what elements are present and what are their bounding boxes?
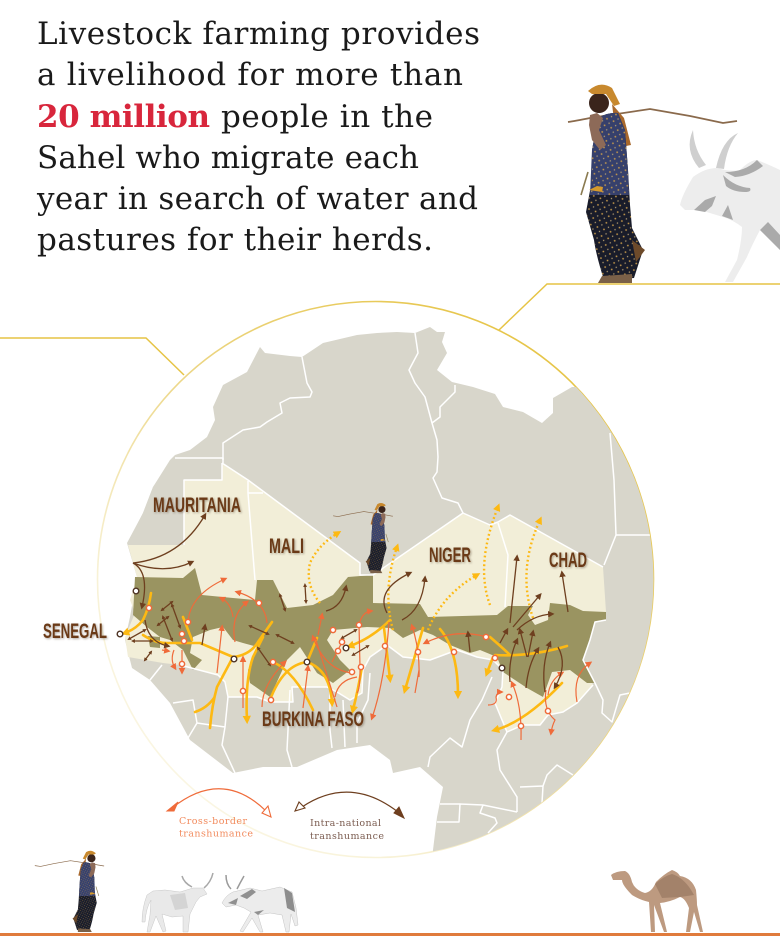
- cow, bottom, facing left: [222, 875, 298, 932]
- herder, top right: [568, 85, 737, 283]
- camel: [611, 870, 703, 932]
- brown routes, intra-national: [129, 515, 568, 692]
- headline text: year in search of water and: [36, 181, 478, 217]
- country labels: NIGER: [429, 544, 471, 567]
- country labels: [43, 494, 587, 731]
- legend: cross-border transhumance: Cross-border: [179, 816, 247, 827]
- yellow routes, thick: [125, 593, 567, 730]
- origin markers, dark rings: [133, 588, 505, 671]
- country borders: [150, 333, 650, 833]
- country labels: BURKINA FASO: [262, 708, 364, 731]
- ground bar, bottom: [0, 933, 780, 936]
- country labels: MALI: [269, 535, 304, 558]
- headline text: 20 million: [37, 99, 210, 135]
- yellow routes, dotted: [309, 507, 540, 630]
- herder on the map: [333, 503, 393, 573]
- callout line, upper right: [499, 284, 780, 330]
- headline text: people in the: [221, 99, 433, 135]
- country labels: CHAD: [549, 549, 587, 572]
- Western Sahara patch: [142, 486, 154, 514]
- legend: cross-border transhumance: [167, 789, 271, 840]
- legend: intra-national transhumance: Intra-national: [310, 818, 381, 829]
- map of West Africa: [123, 327, 654, 852]
- cow, bottom, facing right: [142, 873, 213, 932]
- callout line, upper left: [0, 338, 184, 375]
- legend: intra-national transhumance: transhumance: [310, 831, 384, 842]
- legend: intra-national transhumance: [295, 792, 404, 842]
- land base: [125, 327, 654, 852]
- origin markers, orange rings: [146, 600, 551, 729]
- orange routes, cross-border: [162, 579, 590, 740]
- headline text: Livestock farming provides: [37, 16, 480, 52]
- map circle outline: [98, 302, 654, 858]
- transhumance belt, olive: [133, 568, 606, 697]
- legend: [167, 789, 404, 842]
- country labels: MAURITANIA: [153, 494, 241, 517]
- headline text: pastures for their herds.: [37, 222, 433, 258]
- headline text: Sahel who migrate each: [37, 140, 419, 176]
- headline text: a livelihood for more than: [37, 57, 463, 93]
- Senegal origin marker: [117, 631, 123, 637]
- legend: cross-border transhumance: transhumance: [179, 828, 253, 840]
- country labels: SENEGAL: [43, 620, 107, 643]
- pastoral zone, cream: [125, 463, 606, 732]
- illustration: herder and cow, top right: [568, 85, 780, 283]
- herder, bottom left: [35, 851, 104, 932]
- headline text: [36, 16, 480, 258]
- cow, top right: [680, 130, 780, 282]
